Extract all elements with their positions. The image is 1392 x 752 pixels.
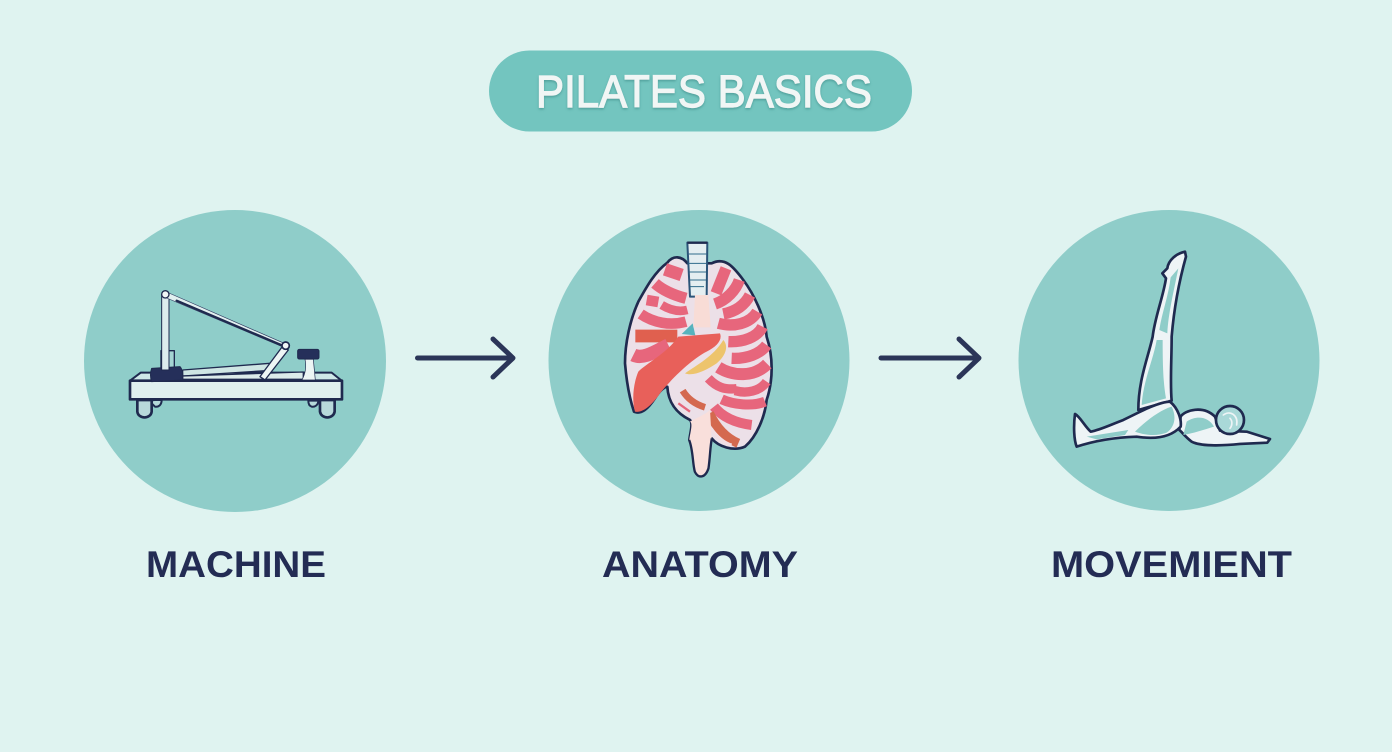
movement circle: [1018, 210, 1320, 511]
panel: movement: [1018, 210, 1320, 585]
panel: anatomy: [548, 210, 850, 585]
anatomy circle: [548, 210, 850, 511]
panel: machine: [84, 210, 386, 585]
title: [489, 50, 912, 132]
label: machine: MACHINE: [146, 544, 326, 585]
icon: pilates reformer machine: [130, 291, 342, 417]
icon: anatomy torso: [625, 243, 772, 476]
label: anatomy: ANATOMY: [602, 544, 798, 585]
arrow: machine to anatomy: [418, 339, 513, 377]
icon: figure lying with legs raised: [1074, 252, 1270, 447]
label: movement: MOVEMIENT: [1051, 544, 1292, 585]
machine circle: [84, 210, 386, 512]
title: PILATES BASICS: [536, 66, 872, 117]
arrow: anatomy to movement: [881, 339, 979, 377]
